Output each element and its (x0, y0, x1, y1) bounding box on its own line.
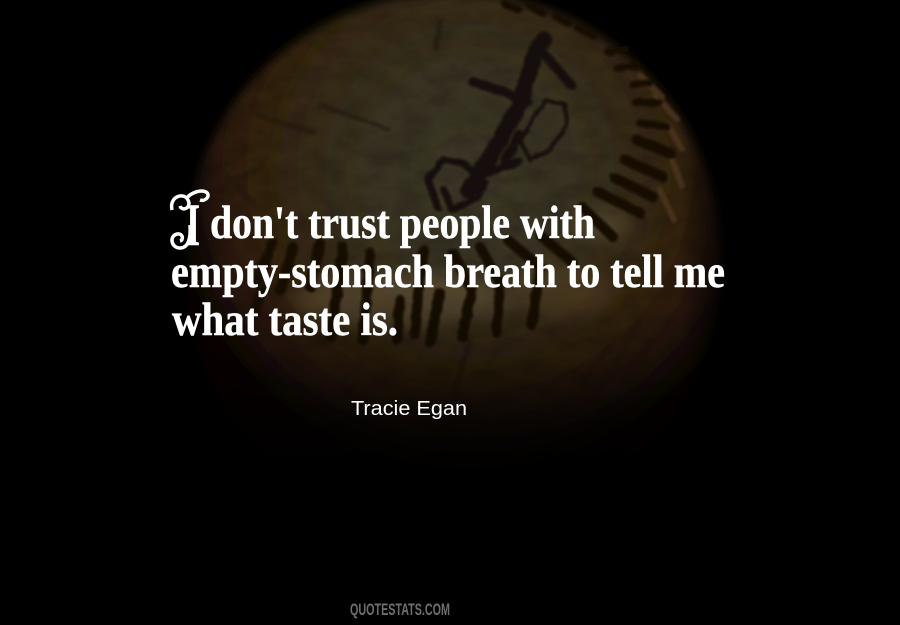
baseball (187, 0, 720, 432)
bottom fade (150, 290, 770, 480)
author: Tracie Egan (351, 398, 467, 420)
quote poster (170, 0, 724, 618)
lighter leather patches along the seam (290, 211, 630, 326)
quote line 1 (172, 191, 595, 258)
side fades (160, 0, 220, 520)
lower black cover (150, 479, 770, 539)
faint ball markings (215, 20, 650, 410)
quote text (171, 191, 725, 346)
quote line 2: empty-stomach breath to tell me (171, 246, 725, 298)
logo signature (428, 40, 571, 210)
quote line 3: what taste is. (172, 294, 398, 346)
quote line 1: don't trust people with (210, 197, 595, 249)
leather grain (257, 31, 664, 264)
right rim highlights (640, 75, 682, 220)
initial I with swash: I (186, 192, 200, 258)
watermark: QUOTESTATS.COM (350, 600, 450, 619)
initial I with swash (172, 191, 208, 258)
baseball stitches (254, 4, 670, 343)
